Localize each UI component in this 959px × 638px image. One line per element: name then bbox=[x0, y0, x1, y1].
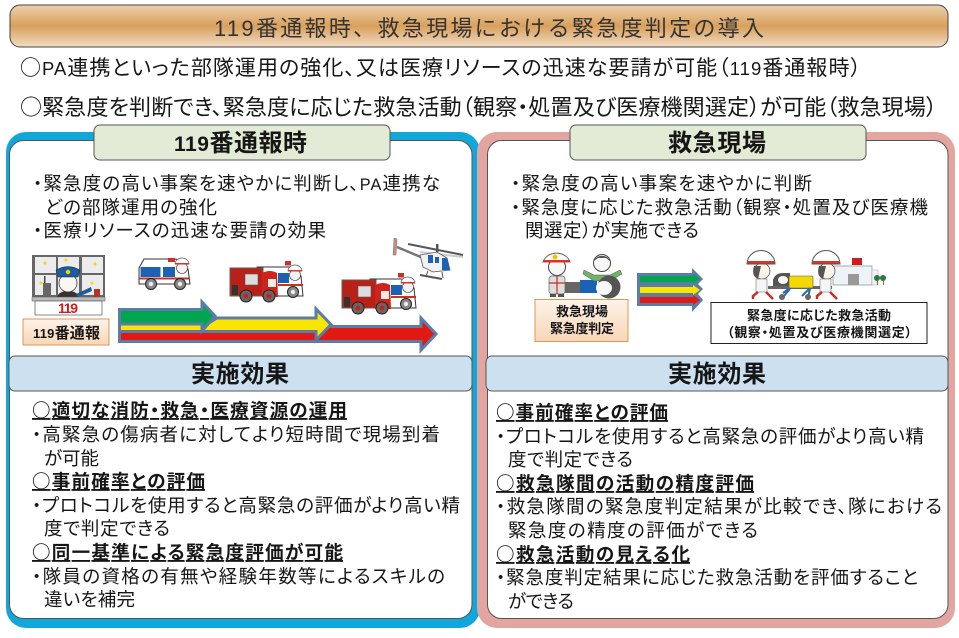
text block: 119 call results bbox=[32, 397, 460, 610]
icon: ambulance bbox=[139, 258, 190, 290]
panel: rescue scene bbox=[477, 125, 955, 628]
text block: 119 call results: ○適切な消防・救急・医療資源の運用 bbox=[32, 397, 347, 423]
text block: rescue scene results: ・緊急度判定結果に応じた救急活動を評価すること bbox=[496, 567, 918, 588]
text block: 119 call description: ・緊急度の高い事案を速やかに判断し、PA連携な bbox=[33, 173, 440, 194]
icon: stretcher team and hospital bbox=[747, 251, 886, 300]
text block: 119 call results: ・高緊急の傷病者に対してより短時間で現場到着 bbox=[32, 424, 440, 445]
label: scene urgency judgment: 緊急度判定 bbox=[550, 321, 614, 336]
label: scene urgency judgment bbox=[535, 300, 628, 342]
band: results heading bbox=[486, 356, 948, 391]
text block: 119 call results: 違いを補完 bbox=[44, 589, 135, 610]
arrows: escalating response bbox=[120, 302, 436, 350]
band: results heading: 実施効果 bbox=[191, 361, 289, 388]
text block: 119 call description: ・医療リソースの迅速な要請の効果 bbox=[33, 220, 326, 241]
icon: fire engine and ambulance bbox=[230, 261, 303, 302]
heading: 119 call: 119番通報時 bbox=[174, 130, 307, 157]
label: urgency-based activity: 緊急度に応じた救急活動 bbox=[747, 308, 891, 323]
text block: rescue scene results: 緊急度の精度の評価ができる bbox=[508, 520, 758, 541]
label: urgency-based activity: （観察・処置及び医療機関選定） bbox=[727, 325, 912, 340]
label: 119 call bbox=[23, 319, 109, 345]
text block: 119 call results: ・隊員の資格の有無や経験年数等によるスキルの bbox=[32, 566, 445, 587]
text block: rescue scene results: ・プロトコルを使用すると高緊急の評価がより高い精 bbox=[496, 426, 924, 447]
text block: 119 call description: どの部隊運用の強化 bbox=[45, 197, 217, 218]
text block: rescue scene description: ・緊急度に応じた救急活動（観察・処置及び医療機 bbox=[511, 197, 928, 218]
text block: rescue scene description bbox=[511, 173, 928, 241]
heading: rescue scene bbox=[570, 125, 866, 160]
label: scene urgency judgment: 救急現場 bbox=[556, 304, 608, 319]
arrows: three-level response bbox=[637, 268, 703, 312]
summary line 2: ○緊急度を判断でき、緊急度に応じた救急活動（観察・処置及び医療機関選定）が可能（救急現場） bbox=[20, 90, 937, 122]
label: 119 call: 119番通報 bbox=[33, 325, 100, 342]
text block: rescue scene results: ○救急活動の見える化 bbox=[496, 541, 690, 567]
icon: dispatcher operator bbox=[32, 255, 105, 316]
title bar bbox=[10, 5, 948, 47]
text block: rescue scene results: ○事前確率との評価 bbox=[496, 399, 668, 425]
band: results heading bbox=[9, 356, 472, 391]
text block: 119 call results: ○同一基準による緊急度評価が可能 bbox=[32, 539, 343, 565]
heading: 119 call bbox=[94, 125, 390, 160]
title bar: 119番通報時、救急現場における緊急度判定の導入 bbox=[214, 16, 764, 41]
text block: 119 call results: ○事前確率との評価 bbox=[32, 468, 205, 494]
text block: rescue scene results: ・救急隊間の緊急度判定結果が比較でき、隊における bbox=[496, 496, 942, 517]
label: urgency-based activity bbox=[711, 302, 927, 344]
icon: fire engine, ambulance and helicopter bbox=[342, 238, 463, 314]
text block: rescue scene results: ができる bbox=[508, 591, 574, 612]
band: results heading: 実施効果 bbox=[668, 361, 766, 388]
text block: 119 call description bbox=[33, 173, 440, 241]
panel: 119 call bbox=[6, 125, 480, 628]
text block: rescue scene results: ○救急隊間の活動の精度評価 bbox=[496, 470, 754, 496]
icon: paramedic and patient bbox=[543, 253, 622, 298]
text block: 119 call results: が可能 bbox=[44, 448, 99, 469]
heading: rescue scene: 救急現場 bbox=[668, 130, 766, 157]
text block: rescue scene results bbox=[496, 399, 942, 612]
text block: rescue scene description: ・緊急度の高い事案を速やかに判断 bbox=[511, 173, 812, 194]
text block: 119 call results: 度で判定できる bbox=[44, 518, 170, 539]
text block: rescue scene description: 関選定）が実施できる bbox=[525, 220, 699, 241]
icon: dispatcher operator: 119 bbox=[58, 300, 78, 316]
summary line 1: ○PA連携といった部隊運用の強化、又は医療リソースの迅速な要請が可能（119番通報時） bbox=[20, 52, 861, 82]
text block: rescue scene results: 度で判定できる bbox=[508, 449, 633, 470]
text block: 119 call results: ・プロトコルを使用すると高緊急の評価がより高い精 bbox=[32, 495, 460, 516]
